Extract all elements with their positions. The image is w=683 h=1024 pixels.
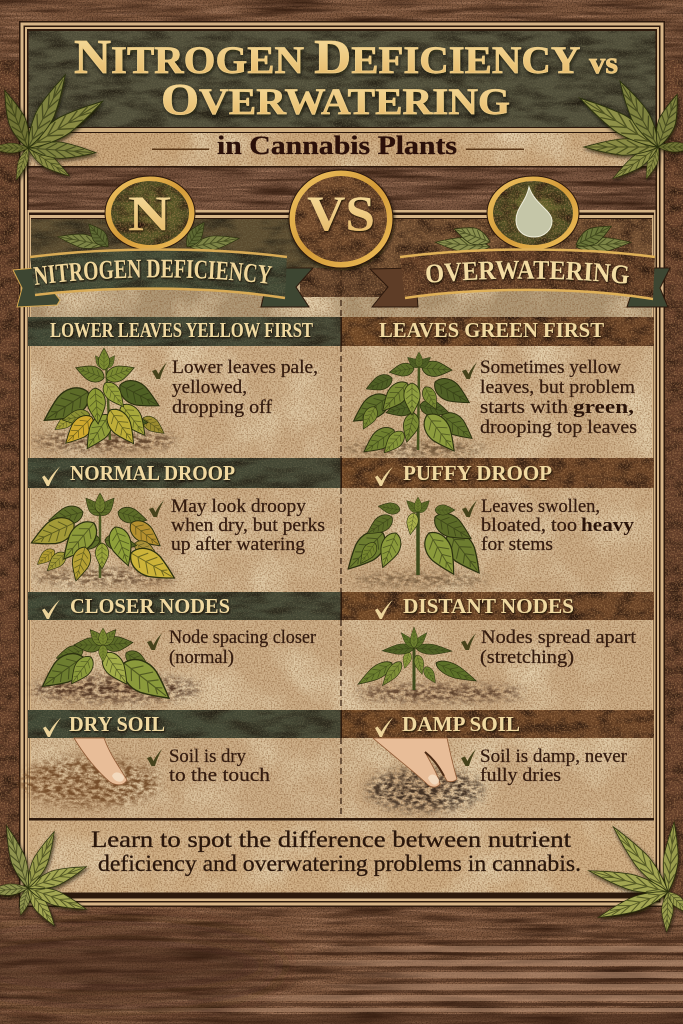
left bark margin [0, 60, 20, 900]
plant: normal droop [26, 493, 181, 589]
right banner label [426, 279, 629, 284]
row 1 header left [28, 317, 340, 346]
right band [341, 219, 652, 269]
footer text: deficiency and overwatering problems in cannabis. [98, 851, 581, 876]
row 2 left text: May look droopy [171, 497, 307, 517]
row 4 right text [461, 747, 627, 786]
row 1 left text: Lower leaves pale, [172, 358, 318, 378]
row 3 cell left [31, 620, 342, 710]
left banner tails [13, 268, 313, 307]
plant: puffy droop [339, 497, 489, 581]
row 3 right text: (stretching) [480, 648, 574, 668]
soil patches [20, 432, 525, 811]
row 2 header right: PUFFY DROOP [403, 461, 552, 485]
row 2 right text: heavy [581, 516, 635, 536]
row 3 left text: (normal) [169, 648, 234, 668]
right bark margin [665, 60, 683, 900]
row 3 header left: CLOSER NODES [70, 594, 230, 618]
row 3 left text: Node spacing closer [169, 628, 316, 648]
strip below banners [31, 268, 652, 317]
plant: distant nodes [355, 627, 479, 690]
row 1 left text [152, 358, 318, 418]
title [74, 29, 618, 124]
right banner: OVERWATERING [426, 260, 630, 286]
plant: closer nodes [35, 626, 178, 709]
row 3 header right [342, 592, 654, 620]
row 1 header left: LOWER LEAVES YELLOW FIRST [50, 318, 313, 342]
corner leaf: top right [575, 77, 683, 184]
left banner [30, 248, 288, 300]
row 2 right text: for stems [481, 535, 553, 555]
brown tie band behind center [300, 268, 390, 297]
row 3 left text [147, 628, 316, 668]
corner leaf: bottom left [0, 823, 89, 929]
title divider [28, 128, 656, 132]
row 1 right text [462, 358, 637, 438]
row 2 header left: NORMAL DROOP [70, 461, 235, 485]
row 3 right text: Nodes spread apart [481, 628, 637, 648]
row 1 cell right [341, 346, 652, 458]
row 1 header right: LEAVES GREEN FIRST [379, 318, 604, 342]
row 4 left text: Soil is dry [169, 747, 247, 767]
water drop medallion [487, 176, 579, 250]
small leaves beside N medallion [57, 218, 240, 254]
plant: lower leaves yellow [37, 348, 168, 454]
upper wood band [28, 167, 656, 212]
subtitle ribbon [28, 131, 656, 168]
left banner: NITROGEN DEFICIENCY [33, 260, 274, 287]
row 1 right text: Sometimes yellow [480, 358, 622, 378]
row 4 left text: to the touch [169, 766, 270, 786]
row 2 right text: Leaves swollen, [481, 497, 600, 517]
row 2 header right [342, 458, 654, 488]
row 4 right text: fully dries [480, 766, 561, 786]
small leaves beside drop medallion [435, 219, 631, 254]
right banner [400, 248, 656, 300]
row 1 left text: yellowed, [172, 378, 247, 398]
hand: dry soil finger [74, 738, 127, 785]
corner leaf: bottom right [587, 822, 683, 932]
row 1 right text: drooping top leaves [480, 418, 637, 438]
comparison section frame [28, 210, 656, 900]
right banner tails [370, 268, 670, 307]
icon: water drop [516, 187, 552, 237]
row 3 right text [461, 628, 637, 668]
row 4 left text [147, 747, 270, 786]
row 1 left text: dropping off [172, 398, 273, 418]
left banner label [35, 277, 270, 285]
row 2 cell right [341, 488, 652, 592]
row 4 right text: Soil is damp, never [480, 747, 627, 767]
row 4 cell right [341, 738, 652, 818]
footer text: Learn to spot the difference between nutrient [91, 827, 572, 852]
footer text [91, 827, 581, 876]
hand: damp soil fingers [373, 738, 457, 787]
row 4 cell left [31, 738, 342, 818]
corner leaf: top left [0, 71, 108, 181]
row 3 cell right [341, 620, 652, 710]
row 4 header right: DAMP SOIL [402, 712, 520, 736]
row 1 right text: leaves, but problem [480, 378, 636, 398]
N medallion: N [128, 185, 171, 241]
row 1 cell left [31, 346, 342, 458]
footer panel [29, 818, 654, 892]
left band [31, 219, 341, 269]
VS medallion [289, 170, 393, 268]
VS medallion: VS [307, 185, 375, 241]
row 2 header left [28, 458, 340, 488]
row 2 right text: bloated, too [481, 516, 577, 536]
row 4 header left [28, 710, 340, 738]
title: OVERWATERING [161, 75, 510, 124]
row 4 header left: DRY SOIL [69, 712, 165, 736]
row 2 cell left [31, 488, 342, 592]
row 3 header right: DISTANT NODES [403, 594, 574, 618]
row 1 header right [342, 317, 654, 346]
row 2 right text [462, 497, 635, 555]
title: NITROGEN DEFICIENCY vs [74, 29, 618, 84]
centre dashed divider [340, 270, 342, 815]
N medallion [105, 176, 195, 250]
row 2 left text: up after watering [171, 535, 305, 555]
plant: green drooping leaves [347, 352, 478, 459]
subtitle: in Cannabis Plants [217, 131, 457, 160]
row 3 header left [28, 592, 340, 620]
row 2 left text [149, 497, 325, 555]
row 4 header right [342, 710, 654, 738]
title panel [28, 31, 656, 127]
row 1 right text: green, [573, 398, 634, 418]
row 1 right text: starts with [480, 398, 568, 418]
wood floor stripes [0, 930, 683, 1024]
row 2 left text: when dry, but perks [171, 516, 325, 536]
